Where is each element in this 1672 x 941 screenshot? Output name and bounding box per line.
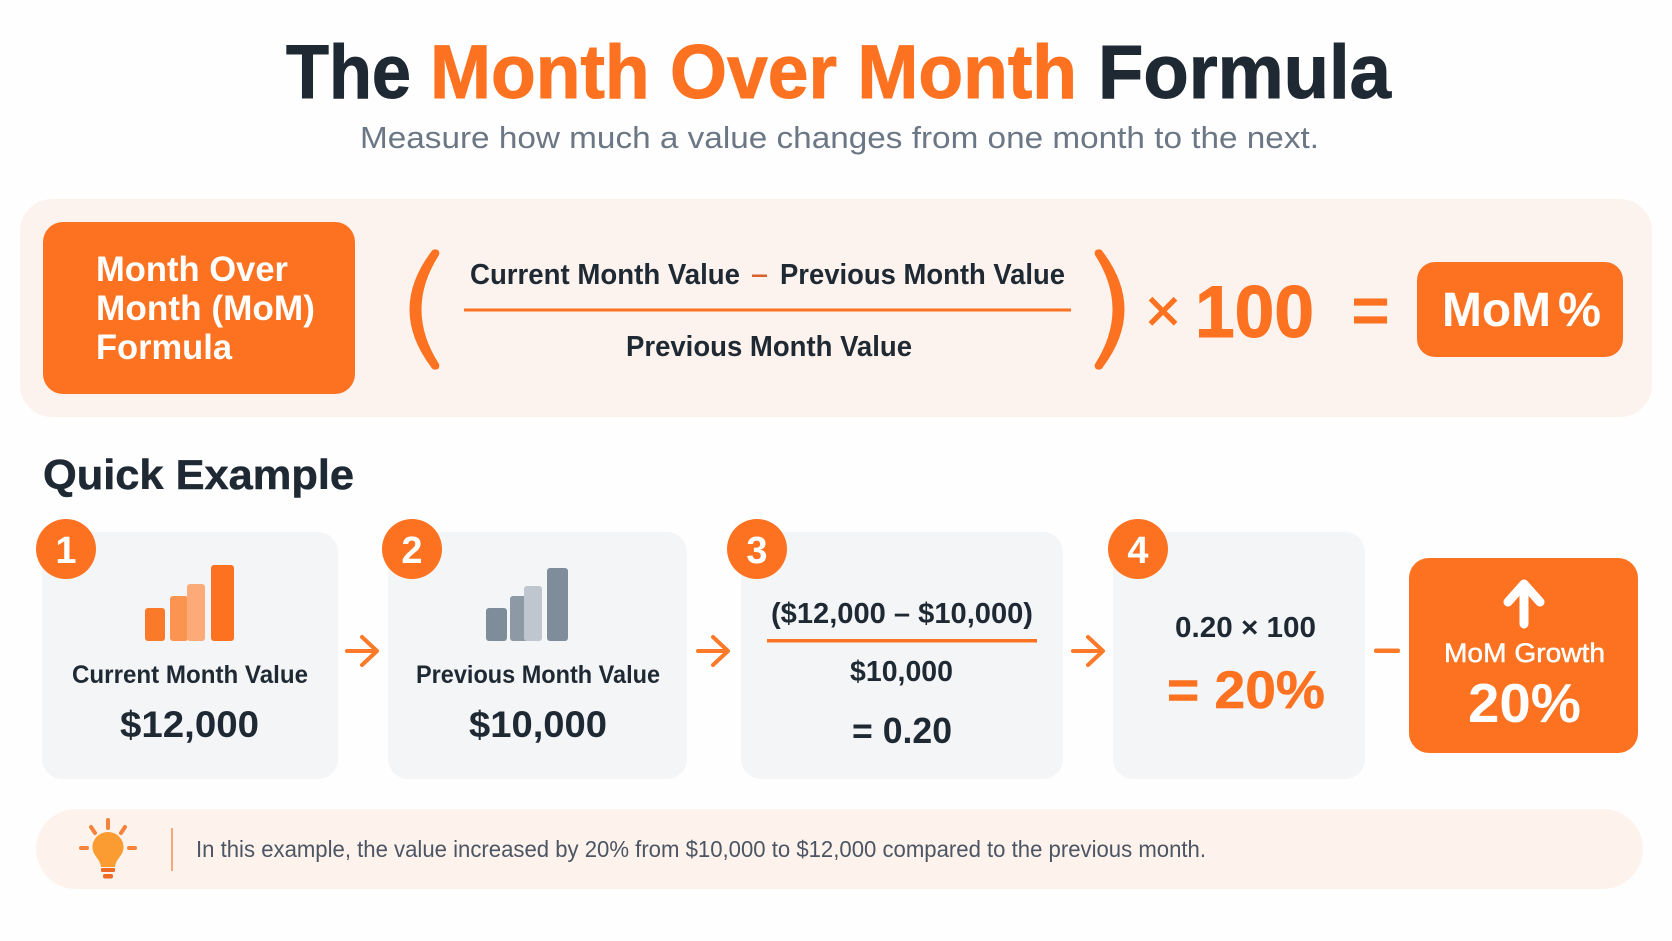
badge 1: 1 xyxy=(55,530,77,572)
result box: MoM % xyxy=(1417,262,1623,357)
step 1 card xyxy=(36,519,338,779)
takeaway strip: In this example, the value increased by 20% from $10,000 to $12,000 compared to the previous month. xyxy=(196,836,1206,862)
heading: quick example: Quick Example xyxy=(43,451,354,498)
title: The xyxy=(286,30,411,115)
right parenthesis xyxy=(1095,249,1124,370)
equals sign: = xyxy=(1351,273,1390,347)
result box: MoM %: MoM xyxy=(1442,284,1551,337)
multiply by 100: 100 xyxy=(1195,272,1314,353)
title: Month Over Month xyxy=(430,30,1077,115)
step 4 card: 0.20 × 100 xyxy=(1175,612,1316,644)
result card: MoM growth: 20% xyxy=(1468,672,1581,734)
step 3 card: $10,000 xyxy=(850,656,953,688)
icon: orange bars xyxy=(145,565,234,641)
icon: up arrow xyxy=(1508,584,1540,624)
badge 1 xyxy=(36,519,96,579)
title xyxy=(286,30,1392,115)
title: Formula xyxy=(1098,30,1392,115)
badge 2 xyxy=(382,519,442,579)
subtitle: Measure how much a value changes from one month to the next. xyxy=(360,120,1319,155)
result box: MoM %: % xyxy=(1558,284,1601,337)
step 3 card xyxy=(727,519,1063,779)
result card: MoM growth xyxy=(1409,558,1638,753)
formula label box: Formula xyxy=(96,328,233,367)
panel: formula xyxy=(20,199,1652,417)
badge 2: 2 xyxy=(401,530,423,572)
step 1 card: $12,000 xyxy=(120,704,259,745)
takeaway strip xyxy=(36,809,1643,889)
fraction xyxy=(464,259,1071,363)
multiply by 100: × xyxy=(1145,277,1181,346)
fraction: Previous Month Value xyxy=(626,331,912,363)
step 2 card xyxy=(382,519,687,779)
connector dash xyxy=(1374,648,1400,653)
badge 4 xyxy=(1108,519,1168,579)
icon: grey bars xyxy=(486,568,568,641)
formula label box: Month Over xyxy=(96,250,288,289)
step 2 card: $10,000 xyxy=(469,704,607,745)
result card: MoM growth: MoM Growth xyxy=(1444,638,1605,668)
formula label box xyxy=(43,222,355,394)
step 1 card: Current Month Value xyxy=(72,661,308,689)
badge 3: 3 xyxy=(746,530,768,572)
step 3 card: = 0.20 xyxy=(852,710,952,751)
arrow 1 xyxy=(347,637,377,665)
step 2 card: Previous Month Value xyxy=(416,661,660,689)
step 3 card: ($12,000 – $10,000) xyxy=(771,598,1033,630)
formula label box: Month (MoM) xyxy=(96,289,315,328)
badge 3 xyxy=(727,519,787,579)
fraction: Previous Month Value xyxy=(780,259,1065,291)
step 4 card: = 20% xyxy=(1167,661,1325,720)
left parenthesis xyxy=(410,249,439,370)
arrow 2 xyxy=(698,637,728,665)
multiply by 100 xyxy=(1145,272,1314,353)
step 4 card xyxy=(1108,519,1365,779)
fraction: Current Month Value xyxy=(470,259,740,291)
icon: light bulb xyxy=(81,820,135,878)
badge 4: 4 xyxy=(1127,530,1149,572)
arrow 3 xyxy=(1073,637,1103,665)
